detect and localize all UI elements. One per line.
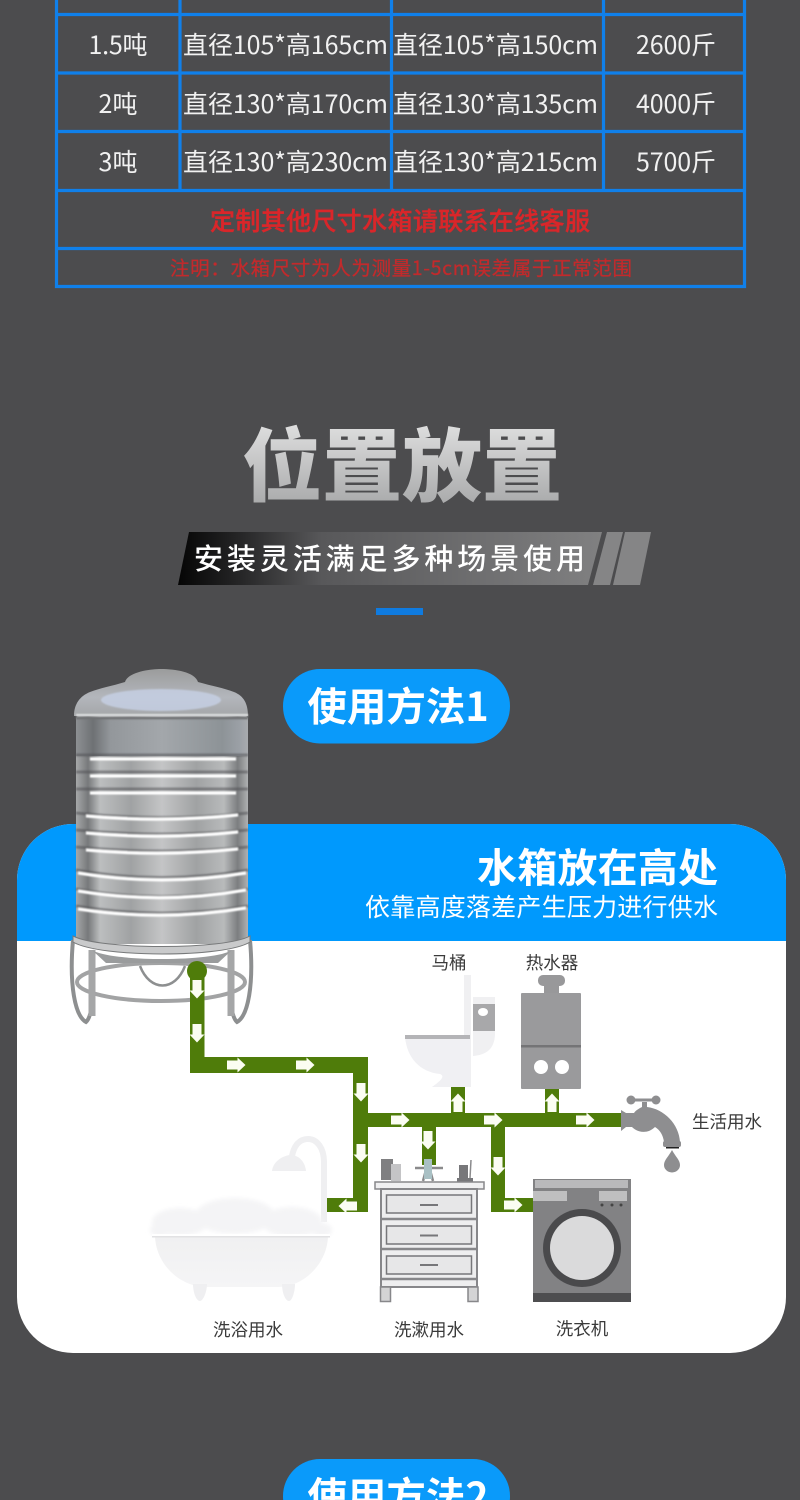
- accent bar: [376, 608, 423, 615]
- icon: faucet: [621, 1096, 681, 1173]
- banner text: 安装灵活满足多种场景使用: [194, 536, 585, 578]
- table row: 2 ton: [98, 85, 716, 121]
- flow arrows: [190, 980, 594, 1214]
- table row: 2 ton: 4000斤: [636, 85, 716, 121]
- panel heading: 水箱放在高处: [477, 836, 718, 894]
- custom size notice: 定制其他尺寸水箱请联系在线客服: [210, 202, 590, 238]
- table row: 1.5 ton: 直径105*高165cm: [183, 26, 388, 62]
- icon: toilet: [405, 975, 495, 1087]
- table row: 2 ton: 2吨: [98, 85, 138, 121]
- table row: 1.5 ton: 直径105*高150cm: [393, 26, 598, 62]
- table row: 3 ton: 3吨: [98, 143, 138, 179]
- diagram labels: 洗浴用水: [213, 1317, 283, 1342]
- tank ribs: [76, 715, 248, 915]
- icon: water heater: [521, 975, 581, 1089]
- diagram labels: 生活用水: [692, 1109, 762, 1134]
- subtitle banner: [178, 532, 651, 585]
- panel white base: [17, 824, 786, 1353]
- measurement note: 注明：水箱尺寸为人为测量1-5cm误差属于正常范围: [170, 252, 632, 281]
- icon: vanity cabinet: [375, 1159, 484, 1302]
- diagram labels: 热水器: [526, 950, 578, 975]
- tank body: [76, 716, 248, 944]
- panel blue header: [17, 824, 786, 941]
- panel subheading: 依靠高度落差产生压力进行供水: [365, 888, 718, 924]
- table row: 1.5 ton: 2600斤: [636, 26, 716, 62]
- tank base ring: [73, 936, 250, 954]
- table row: 3 ton: 直径130*高215cm: [393, 143, 598, 179]
- tank upper band: [76, 718, 248, 756]
- table row: 2 ton: 直径130*高135cm: [393, 85, 598, 121]
- pill: method 2: [283, 1459, 510, 1500]
- table row: 1.5 ton: [88, 26, 716, 62]
- tank dome highlight: [101, 689, 221, 711]
- pill: method 1: [283, 669, 510, 744]
- diagram labels: 马桶: [432, 950, 466, 975]
- icon: washing machine: [533, 1179, 631, 1302]
- diagram labels: [213, 950, 762, 1342]
- diagram labels: 洗衣机: [556, 1316, 609, 1341]
- icon: bathtub with shower: [150, 1139, 332, 1301]
- plumbing pipes: [187, 961, 622, 1212]
- tank legs: [72, 940, 251, 1022]
- water tank: [72, 669, 251, 1022]
- pill: method 1: 使用方法1: [307, 676, 489, 733]
- table row: 3 ton: [98, 143, 716, 179]
- table row: 3 ton: 5700斤: [636, 143, 716, 179]
- table row: 2 ton: 直径130*高170cm: [183, 85, 388, 121]
- table row: 3 ton: 直径130*高230cm: [183, 143, 388, 179]
- size table: [56, 0, 745, 286]
- tank dome: [74, 669, 248, 716]
- heading: 位置放置: 位置放置: [242, 403, 562, 519]
- panel: method 1 diagram: [17, 669, 786, 1353]
- diagram labels: 洗漱用水: [394, 1317, 464, 1342]
- table row: 1.5 ton: 1.5吨: [88, 26, 148, 62]
